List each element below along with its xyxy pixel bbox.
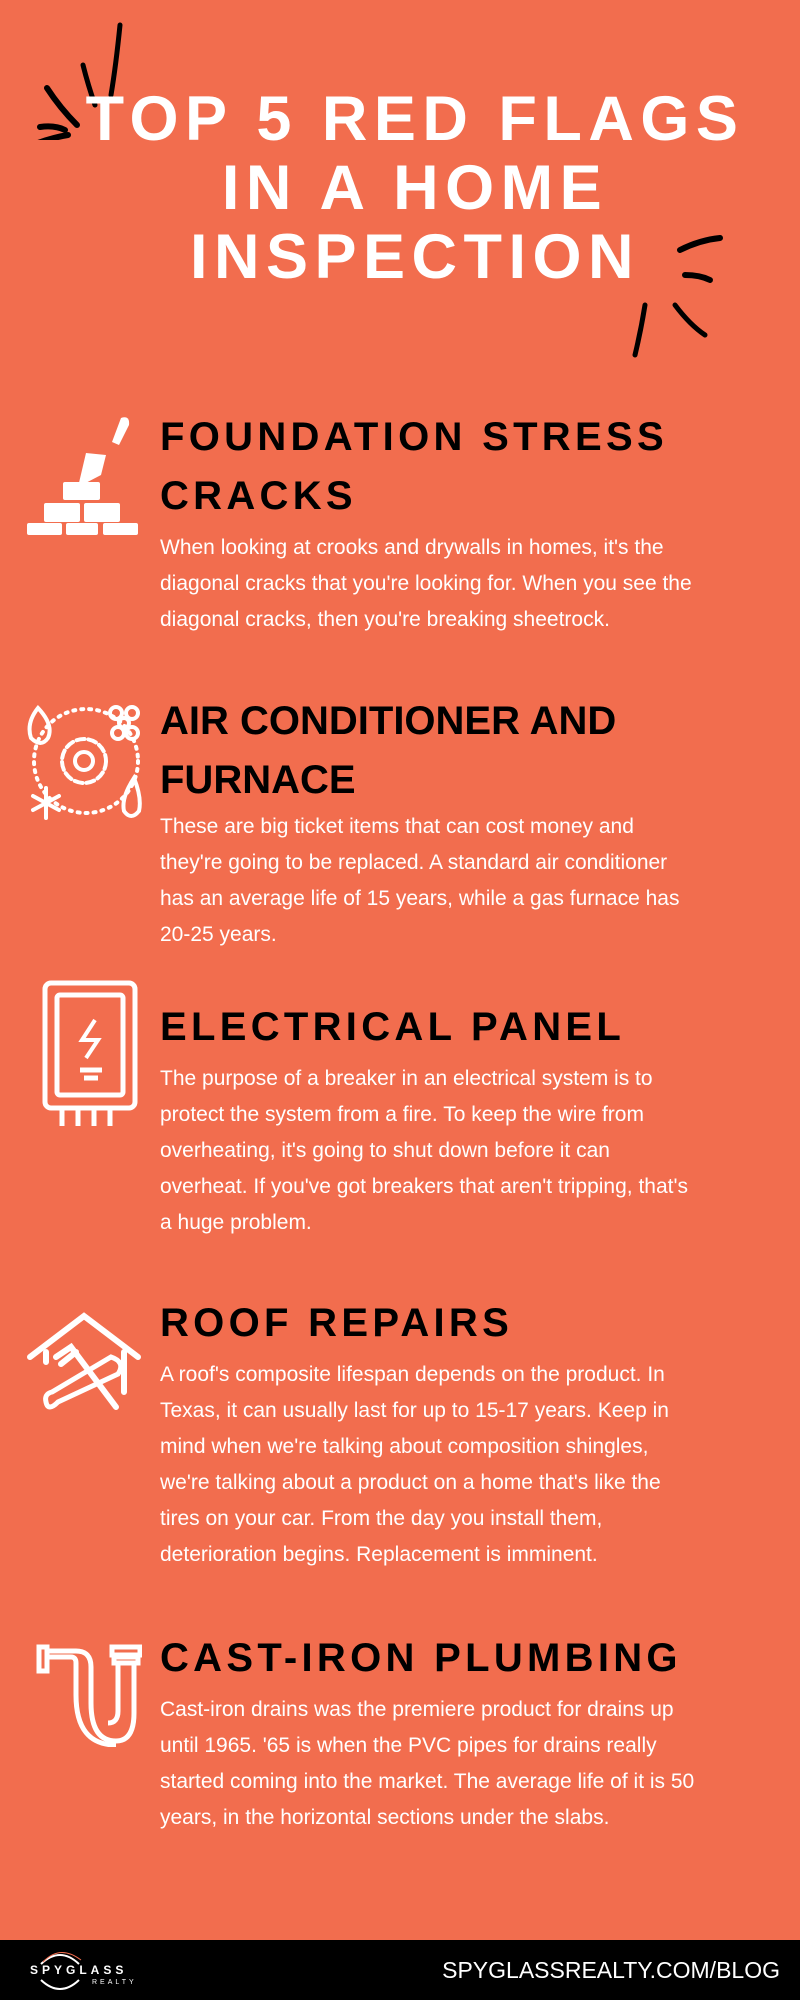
text: hvac: they're going to be replaced. A standard air conditioner	[160, 851, 667, 874]
text: electrical: overheating, it's going to shut down before it can	[160, 1139, 610, 1162]
title	[86, 84, 744, 292]
text: electrical: protect the system from a fire. To keep the wire from	[160, 1103, 644, 1126]
text: foundation	[160, 536, 692, 631]
heading: roof: ROOF REPAIRS	[160, 1301, 513, 1345]
decorative strokes bottom-right	[672, 235, 723, 338]
text: plumbing: started coming into the market. The average life of it is 50	[160, 1770, 694, 1793]
logo: SPYGLASS	[30, 1963, 127, 1977]
text: roof: deterioration begins. Replacement is imminent.	[160, 1543, 598, 1566]
text: roof: A roof's composite lifespan depends on the product. In	[160, 1363, 665, 1386]
text: electrical: a huge problem.	[160, 1211, 312, 1234]
logo	[30, 1952, 137, 1990]
heading: hvac	[160, 699, 616, 802]
text: hvac	[160, 815, 679, 946]
text: electrical: The purpose of a breaker in an electrical system is to	[160, 1067, 653, 1090]
text: roof: mind when we're talking about composition shingles,	[160, 1435, 648, 1458]
icon: electrical panel	[42, 980, 138, 1126]
text: foundation: diagonal cracks that you're looking for. When you see the	[160, 572, 692, 595]
heading: plumbing: CAST-IRON PLUMBING	[160, 1636, 682, 1680]
text: electrical	[160, 1067, 688, 1234]
icon: roof tools	[27, 1312, 141, 1410]
footer	[0, 1940, 800, 2000]
text: plumbing: until 1965. '65 is when the PVC pipes for drains really	[160, 1734, 657, 1757]
heading: hvac: AIR CONDITIONER AND	[160, 699, 616, 743]
text: plumbing: Cast-iron drains was the premiere product for drains up	[160, 1698, 674, 1721]
icon: pipe	[36, 1644, 142, 1747]
text: plumbing: years, in the horizontal sections under the slabs.	[160, 1806, 609, 1829]
logo: REALTY	[92, 1979, 137, 1986]
heading: foundation	[160, 415, 668, 518]
title: TOP 5 RED FLAGS	[86, 84, 744, 154]
text: plumbing	[160, 1698, 694, 1829]
text: hvac: 20-25 years.	[160, 923, 277, 946]
heading: electrical: ELECTRICAL PANEL	[160, 1005, 625, 1049]
title: IN A HOME	[222, 153, 608, 223]
text: hvac: These are big ticket items that can cost money and	[160, 815, 634, 838]
icon: hvac	[28, 705, 142, 820]
text: foundation: When looking at crooks and drywalls in homes, it's the	[160, 536, 664, 559]
heading: hvac: FURNACE	[160, 758, 356, 802]
footer url: SPYGLASSREALTY.COM/BLOG	[442, 1957, 780, 1983]
decorative strokes top-left	[37, 22, 122, 140]
text: roof: Texas, it can usually last for up to 15-17 years. Keep in	[160, 1399, 669, 1422]
text: foundation: diagonal cracks, then you're breaking sheetrock.	[160, 608, 610, 631]
text: roof: we're talking about a product on a home that's like the	[160, 1471, 661, 1494]
heading: foundation: CRACKS	[160, 474, 357, 518]
text: hvac: has an average life of 15 years, while a gas furnace has	[160, 887, 679, 910]
text: electrical: overheat. If you've got breakers that aren't tripping, that's	[160, 1175, 688, 1198]
icon: trowel and bricks	[27, 417, 138, 535]
title: INSPECTION	[190, 222, 640, 292]
text: roof	[160, 1363, 669, 1566]
heading: foundation: FOUNDATION STRESS	[160, 415, 668, 459]
text: roof: tires on your car. From the day you install them,	[160, 1507, 602, 1530]
